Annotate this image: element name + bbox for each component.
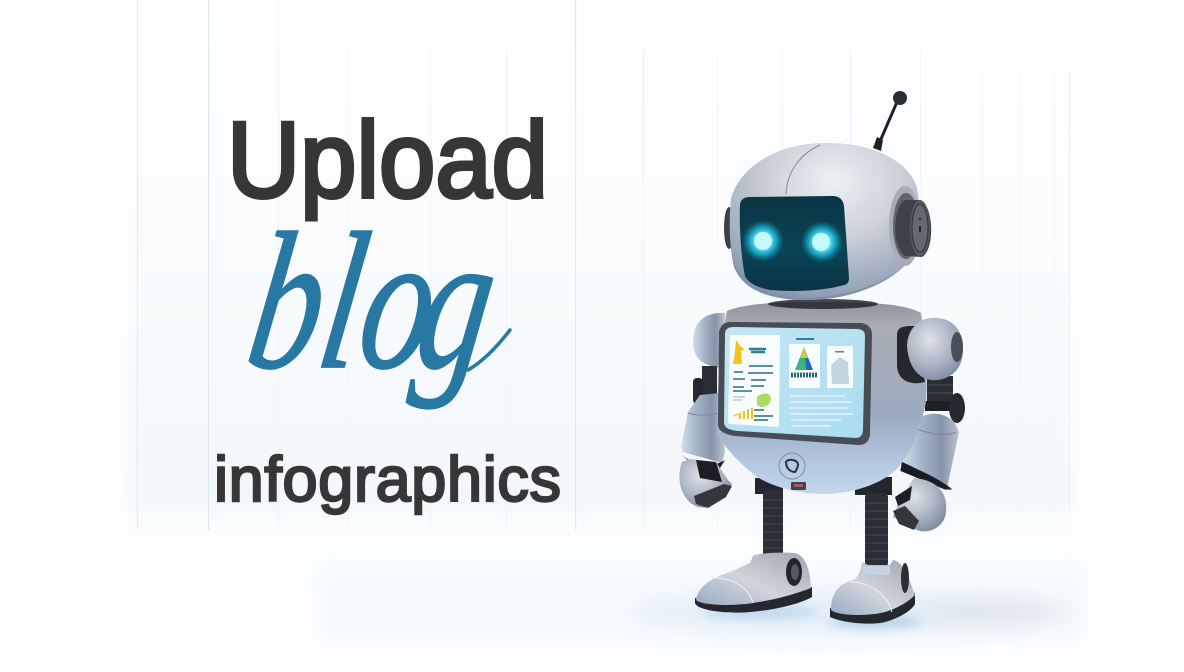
- power badge: [791, 482, 806, 490]
- robot right arm: [893, 376, 965, 531]
- robot eye right: [801, 221, 843, 263]
- robot eye left: [742, 220, 784, 262]
- robot left leg: [755, 478, 783, 558]
- robot right ear: [889, 186, 931, 266]
- document card with sketch: [827, 346, 853, 388]
- robot visor: [740, 196, 849, 291]
- document card with triangle logo: [789, 344, 820, 388]
- robot torso: [717, 299, 927, 494]
- robot right shoulder: [897, 318, 963, 383]
- emblem: [779, 453, 805, 479]
- title: infographics: infographics: [214, 445, 561, 515]
- floor shadow under robot: [625, 592, 1075, 632]
- header bar: [796, 338, 814, 340]
- robot antenna: [873, 91, 907, 151]
- robot head: [730, 143, 931, 300]
- tablet screen: [718, 322, 872, 445]
- robot left ear: [724, 207, 734, 249]
- robot: [679, 91, 965, 624]
- robot right leg: [855, 477, 892, 567]
- title: Upload: Upload: [227, 99, 548, 220]
- robot left foot: [695, 553, 812, 613]
- document card left: [728, 335, 780, 427]
- title: blog (script accent): blog: [236, 193, 510, 410]
- robot right foot: [830, 560, 915, 624]
- robot left arm: [679, 313, 732, 508]
- paragraph lines: [790, 396, 853, 426]
